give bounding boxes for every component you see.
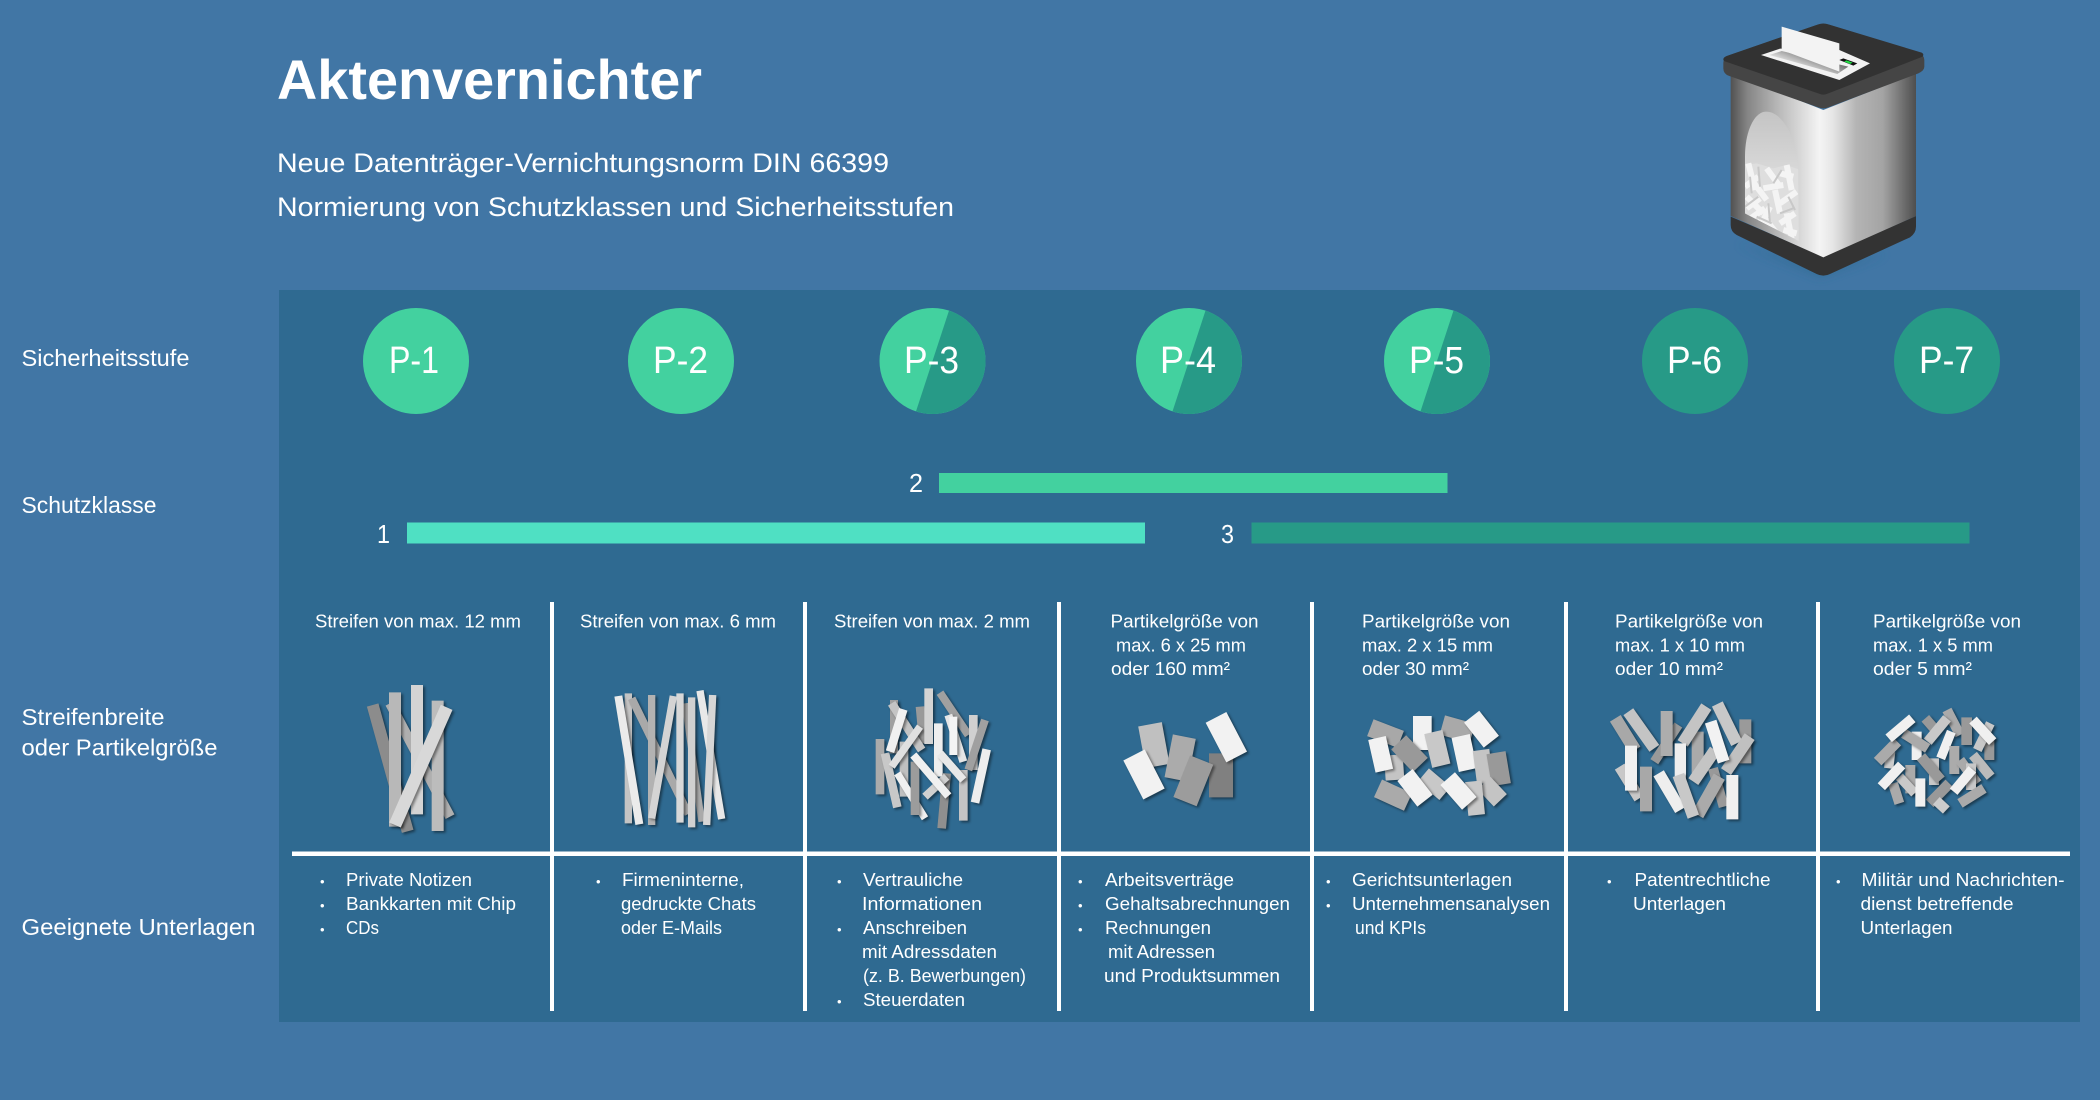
panel: table (279, 290, 2080, 1022)
label: Schutzklasse: Schutzklasse (22, 492, 156, 518)
size label P-5: Partikelgröße von (1362, 610, 1510, 632)
circle P-4: P-4 (1160, 340, 1216, 382)
list P-6: Unterlagen (1633, 893, 1726, 914)
circle P-7: P-7 (1919, 340, 1974, 382)
list P-4: • (1078, 898, 1083, 913)
security level circles (363, 308, 2000, 414)
icon: shreds P-5 (1370, 716, 1501, 815)
suitable documents lists (320, 869, 2064, 1010)
circle P-7 (1894, 308, 2000, 414)
icon: shreds P-7 (1878, 710, 1993, 810)
size label P-7: Partikelgröße von (1873, 610, 2021, 632)
size label P-3: Streifen von max. 2 mm (834, 610, 1030, 632)
icon: shreds P-3 (880, 688, 987, 828)
list P-6: Patentrechtliche (1634, 869, 1770, 890)
list P-4: Gehaltsabrechnungen (1105, 893, 1290, 914)
size label P-4: max. 6 x 25 mm (1116, 634, 1246, 656)
list P-3: • (837, 874, 842, 889)
list P-3 (837, 869, 1026, 1010)
list P-2: oder E-Mails (621, 917, 722, 938)
size label P-4: Partikelgröße von (1110, 610, 1258, 632)
circle P-6 (1642, 308, 1748, 414)
size label P-6 (1615, 610, 1763, 679)
list P-1: Private Notizen (346, 869, 472, 890)
circle P-2 (628, 308, 734, 414)
list P-3: Steuerdaten (863, 989, 965, 1010)
subtitle: Normierung von Schutzklassen und Sicherheitsstufen (277, 192, 954, 222)
label: Streifenbreite oder Partikelgröße (22, 704, 218, 760)
size label P-5: max. 2 x 15 mm (1362, 634, 1493, 656)
list P-7: Unterlagen (1860, 917, 1952, 938)
circle P-1 (363, 308, 469, 414)
circle P-1: P-1 (389, 340, 439, 382)
list P-1: CDs (346, 917, 379, 938)
size label P-7: max. 1 x 5 mm (1873, 634, 1993, 656)
subtitle: Neue Datenträger-Vernichtungsnorm DIN 66399 (277, 148, 889, 178)
icon: shreds P-2 (618, 691, 722, 827)
circle P-3 (880, 308, 986, 414)
list P-2: gedruckte Chats (621, 893, 756, 914)
list P-5: Gerichtsunterlagen (1352, 869, 1512, 890)
label: Geeignete Unterlagen: Geeignete Unterlagen (22, 914, 256, 940)
list P-3: • (837, 922, 842, 937)
list P-2: • (596, 874, 601, 889)
list P-1: • (320, 874, 325, 889)
list P-7: Militär und Nachrichten- (1862, 869, 2064, 890)
size label P-5: oder 30 mm² (1362, 658, 1469, 679)
list P-1 (320, 869, 516, 938)
icon: shreds P-6 (1615, 704, 1750, 819)
list P-4: Arbeitsverträge (1105, 869, 1234, 890)
size label P-4: oder 160 mm² (1111, 658, 1230, 679)
size label P-6: Partikelgröße von (1615, 610, 1763, 632)
list P-3: Informationen (862, 893, 982, 914)
bar: class 3 (1221, 519, 1970, 549)
size label P-7: oder 5 mm² (1873, 658, 1972, 679)
list P-4: • (1078, 922, 1083, 937)
list P-6: • (1607, 874, 1612, 889)
subtitle (277, 148, 954, 222)
list P-3: (z. B. Bewerbungen) (863, 965, 1026, 986)
circle P-6: P-6 (1667, 340, 1722, 382)
list P-7 (1836, 869, 2064, 938)
list P-4: Rechnungen (1105, 917, 1211, 938)
list P-5: • (1326, 874, 1331, 889)
size label P-6: oder 10 mm² (1615, 658, 1723, 679)
list P-1: • (320, 922, 325, 937)
list P-2 (596, 869, 756, 938)
list P-7: dienst betreffende (1860, 893, 2014, 914)
label: Streifenbreite oder Partikelgröße: Streifenbreite (22, 704, 164, 730)
label: Streifenbreite oder Partikelgröße: oder Partikelgröße (22, 734, 218, 760)
list P-4: und Produktsummen (1104, 965, 1280, 986)
list P-1: • (320, 898, 325, 913)
list P-7: • (1836, 874, 1841, 889)
icon: shreds P-1 (373, 685, 450, 831)
bar: class 1: 1 (377, 519, 390, 549)
size label P-4 (1110, 610, 1258, 679)
circle P-3: P-3 (904, 340, 959, 382)
list P-5: und KPIs (1355, 917, 1426, 938)
label: Sicherheitsstufe: Sicherheitsstufe (22, 345, 190, 371)
icon: shreds P-4 (1134, 717, 1237, 802)
size label P-6: max. 1 x 10 mm (1615, 634, 1745, 656)
list P-5: Unternehmensanalysen (1352, 893, 1550, 914)
list P-3: Vertrauliche (863, 869, 963, 890)
size label P-1: Streifen von max. 12 mm (315, 610, 521, 632)
circle P-4 (1136, 308, 1242, 414)
circle P-5 (1384, 308, 1490, 414)
list P-2: Firmeninterne, (622, 869, 744, 890)
bar: class 2 (909, 468, 1448, 498)
list P-3: • (837, 994, 842, 1009)
bar: class 1 (377, 519, 1145, 549)
list P-4: • (1078, 874, 1083, 889)
list P-6 (1607, 869, 1770, 914)
bar: class 2: 2 (909, 468, 923, 498)
size label P-7 (1873, 610, 2021, 679)
list P-4: mit Adressen (1108, 941, 1215, 962)
list P-5: • (1326, 898, 1331, 913)
circle P-2: P-2 (653, 340, 708, 382)
title: Aktenvernichter (277, 48, 702, 111)
protection class bars (377, 468, 1970, 549)
size label P-5 (1362, 610, 1510, 679)
list P-3: mit Adressdaten (862, 941, 997, 962)
list P-1: Bankkarten mit Chip (346, 893, 516, 914)
size label P-2: Streifen von max. 6 mm (580, 610, 776, 632)
row labels (22, 345, 256, 940)
list P-3: Anschreiben (863, 917, 967, 938)
list P-5 (1326, 869, 1550, 938)
strip and particle size labels (315, 610, 2021, 679)
circle P-5: P-5 (1409, 340, 1464, 382)
list P-4 (1078, 869, 1290, 986)
bar: class 3: 3 (1221, 519, 1234, 549)
icon: shredder (1723, 23, 1924, 277)
